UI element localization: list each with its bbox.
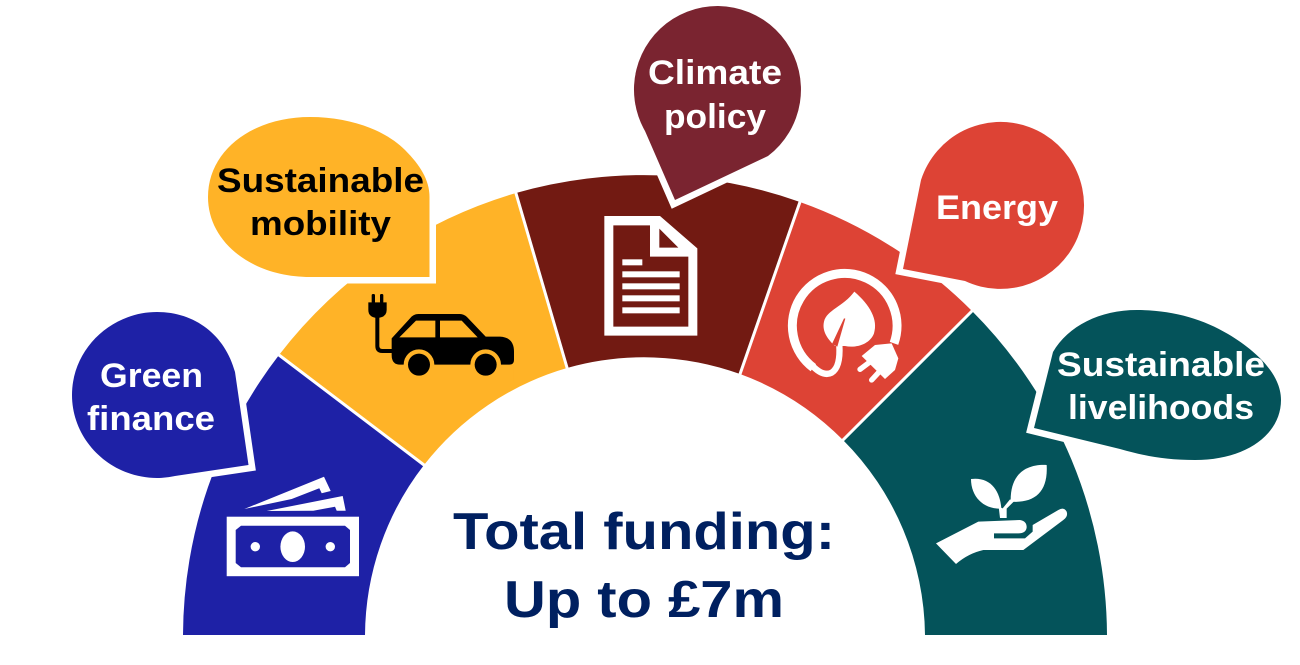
bubble: energy: Energy <box>936 189 1058 227</box>
segment: sustainable livelihoods <box>843 311 1107 635</box>
icon: electric car <box>368 294 514 382</box>
segment: sustainable mobility <box>279 193 567 465</box>
heading: total funding: Up to £7m <box>504 571 784 629</box>
bubble: energy <box>903 122 1084 289</box>
bubble: sustainable mobility <box>208 117 430 277</box>
bubble: sustainable livelihoods: livelihoods <box>1068 389 1254 427</box>
bubble: sustainable mobility: mobility <box>250 205 391 243</box>
icon: hand holding plant <box>936 465 1067 564</box>
icon: banknotes <box>227 477 359 576</box>
bubble: green finance: Green <box>100 357 203 395</box>
bubble: climate policy <box>634 6 801 200</box>
icon: document <box>604 216 697 336</box>
bubble: green finance <box>72 312 248 478</box>
segment: climate policy <box>516 175 800 374</box>
segment: green finance <box>183 355 424 635</box>
bubble: sustainable livelihoods: Sustainable <box>1057 346 1265 384</box>
bubble: climate policy: Climate <box>648 54 782 92</box>
heading: total funding: Total funding: <box>453 503 835 561</box>
bubble: climate policy: policy <box>664 98 766 136</box>
bubble: sustainable livelihoods <box>1034 310 1281 460</box>
segment: energy <box>740 202 972 440</box>
bubble: sustainable mobility: Sustainable <box>217 162 424 200</box>
heading: total funding <box>453 503 835 629</box>
icon: leaf with plug <box>792 273 898 380</box>
bubble: green finance: finance <box>87 400 215 438</box>
